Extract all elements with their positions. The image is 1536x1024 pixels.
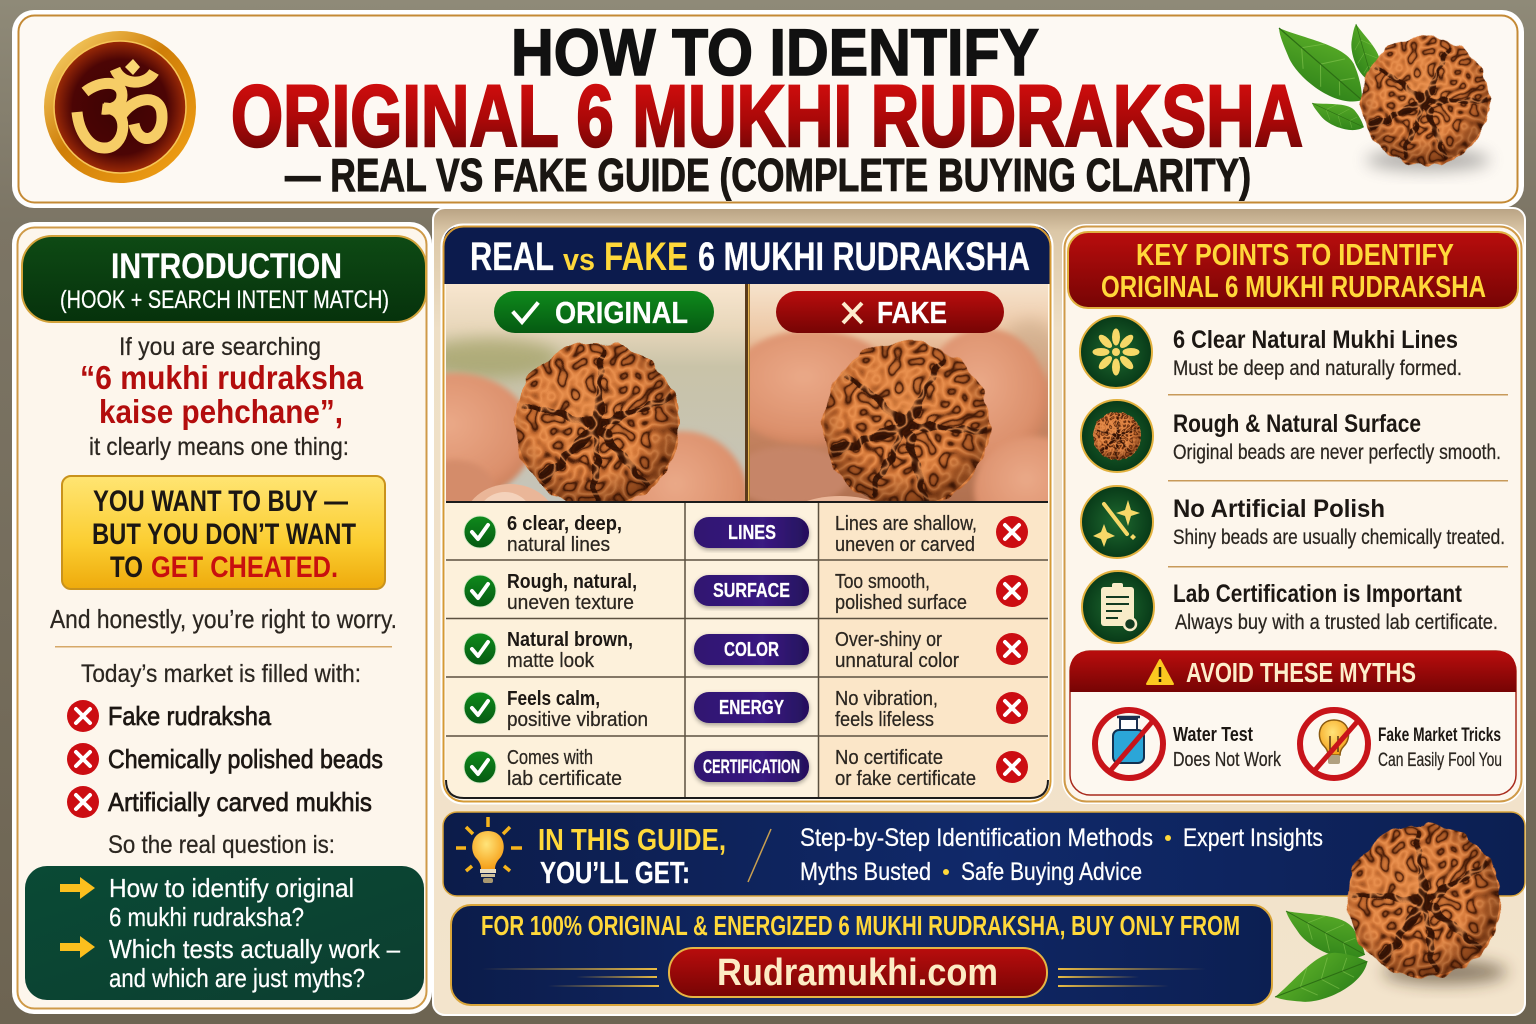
list: market problems	[67, 700, 383, 818]
callout: yellow box: GET CHEATED.	[151, 551, 338, 584]
row: surface: Too smooth,	[835, 571, 930, 593]
row: lines: LINES	[728, 522, 776, 544]
callout: yellow box	[62, 476, 385, 589]
row: energy: positive vibration	[507, 709, 648, 731]
myths header	[1070, 651, 1516, 692]
text: honestly: And honestly, you’re right to worry.	[50, 604, 397, 634]
guide heading: YOU’LL GET:	[540, 855, 690, 890]
row: lines: natural lines	[507, 534, 610, 556]
point: lab certification: Lab Certification is Important	[1173, 580, 1463, 608]
callout: questions	[25, 866, 424, 1000]
cream backdrop	[433, 208, 1525, 1015]
icon: bead	[1081, 400, 1153, 472]
row: lines: uneven or carved	[835, 534, 975, 556]
icon: sparkles	[1081, 486, 1153, 558]
header panel	[12, 10, 1524, 208]
row: lines: Lines are shallow,	[835, 513, 977, 535]
myths header: AVOID THESE MYTHS	[1186, 657, 1416, 688]
icon: rudraksha and leaves bottom right	[1267, 812, 1513, 1015]
icon: no water test	[1095, 710, 1163, 778]
introduction header: (HOOK + SEARCH INTENT MATCH)	[60, 286, 389, 314]
callout: questions: 6 mukhi rudraksha?	[109, 902, 304, 932]
row: lines: 6 clear, deep,	[507, 513, 622, 535]
callout: yellow box: YOU WANT TO BUY —	[93, 485, 348, 518]
list: market problems: Fake rudraksha	[108, 701, 271, 731]
key points header: KEY POINTS TO IDENTIFY	[1136, 237, 1454, 272]
point: mukhi lines: 6 Clear Natural Mukhi Lines	[1173, 326, 1458, 354]
title line 3: — REAL VS FAKE GUIDE (COMPLETE BUYING CLARITY)	[285, 149, 1251, 201]
introduction header: INTRODUCTION	[111, 247, 342, 286]
guide heading: IN THIS GUIDE,	[538, 822, 726, 857]
guide heading	[538, 822, 726, 890]
row: certification: CERTIFICATION	[703, 757, 800, 778]
callout: yellow box: BUT YOU DON’T WANT	[92, 518, 356, 551]
myth: water test	[1095, 710, 1282, 778]
guide list: Step-by-Step Identification Methods	[800, 824, 1153, 852]
badge: fake	[776, 291, 1004, 333]
key points header	[1068, 232, 1518, 308]
icon: om emblem	[44, 31, 196, 183]
introduction header	[22, 236, 426, 322]
text: market: Today’s market is filled with:	[81, 660, 361, 688]
banner: in this guide	[443, 812, 1525, 896]
list: market problems: Artificially carved mukhis	[108, 787, 372, 817]
point: mukhi lines: Must be deep and naturally formed.	[1173, 357, 1462, 380]
text: real question: So the real question is:	[108, 831, 335, 859]
point: mukhi lines	[1080, 316, 1462, 388]
row: energy: feels lifeless	[835, 709, 934, 731]
row: color: Natural brown,	[507, 629, 633, 651]
intro text: kaise pehchane”,	[99, 393, 343, 430]
row: certification: Comes with	[507, 747, 593, 769]
row: lines	[464, 513, 1028, 556]
title line 1: HOW TO IDENTIFY	[511, 15, 1039, 89]
callout: questions: and which are just myths?	[109, 963, 365, 993]
row: surface: SURFACE	[713, 580, 790, 602]
intro text: “6 mukhi rudraksha	[80, 359, 364, 396]
row: energy: No vibration,	[835, 688, 938, 710]
comparison header: vs	[563, 242, 595, 277]
badge: fake: FAKE	[877, 295, 947, 330]
panel: introduction	[12, 222, 432, 1014]
comparison header: FAKE	[604, 235, 688, 279]
call to action: FOR 100% ORIGINAL & ENERGIZED 6 MUKHI RUDRAKSHA, BUY ONLY FROM	[481, 910, 1240, 941]
callout: questions: How to identify original	[109, 873, 354, 903]
point: rough surface	[1081, 400, 1501, 472]
list: market problems: Chemically polished beads	[108, 744, 383, 774]
callout: questions: Which tests actually work –	[109, 934, 400, 964]
comparison table	[446, 502, 1048, 798]
row: surface	[464, 571, 1028, 614]
icon: light bulb	[456, 817, 522, 883]
row: color	[464, 629, 1028, 672]
panel: avoid these myths	[1070, 651, 1516, 795]
website button: Rudramukhi.com	[717, 952, 998, 994]
row: certification: No certificate	[835, 747, 943, 769]
photo: original bead	[446, 284, 745, 501]
guide list: Safe Buying Advice	[961, 858, 1142, 886]
row: certification	[464, 747, 1028, 790]
row: energy: Feels calm,	[507, 688, 600, 710]
myth: market tricks	[1300, 710, 1502, 778]
guide list: Expert Insights	[1183, 824, 1323, 852]
badge: original: ORIGINAL	[555, 295, 688, 330]
panel: key points	[1062, 224, 1524, 804]
myth: water test: Does Not Work	[1173, 749, 1282, 771]
row: color: Over-shiny or	[835, 629, 942, 651]
comparison header: REAL	[470, 235, 554, 279]
icon: no fake bulb	[1300, 710, 1368, 778]
icon: certificate	[1082, 571, 1154, 643]
point: no polish: No Artificial Polish	[1173, 495, 1385, 523]
row: energy	[464, 688, 1028, 731]
icon: rudraksha with leaves	[1265, 10, 1507, 183]
callout: yellow box: TO	[110, 551, 143, 584]
row: certification: lab certificate	[507, 768, 622, 790]
point: no polish	[1081, 486, 1505, 558]
point: rough surface: Rough & Natural Surface	[1173, 410, 1421, 438]
badge: original	[494, 291, 714, 333]
row: color: COLOR	[724, 639, 779, 661]
myth: water test: Water Test	[1173, 724, 1253, 746]
icon: flower	[1080, 316, 1152, 388]
row: color: matte look	[507, 650, 595, 672]
row: certification: or fake certificate	[835, 768, 976, 790]
intro text: If you are searching	[119, 333, 321, 361]
comparison header	[443, 226, 1051, 284]
row: surface: Rough, natural,	[507, 571, 637, 593]
intro text	[80, 333, 364, 461]
panel: real vs fake	[440, 224, 1054, 804]
guide list: Myths Busted	[800, 858, 931, 886]
row: color: unnatural color	[835, 650, 959, 672]
photo: fake bead	[750, 284, 1048, 501]
row: surface: uneven texture	[507, 592, 634, 614]
row: surface: polished surface	[835, 592, 967, 614]
comparison header: 6 MUKHI RUDRAKSHA	[698, 235, 1030, 279]
point: lab certification	[1082, 571, 1498, 643]
call to action	[451, 905, 1272, 1005]
guide list	[800, 824, 1323, 886]
row: energy: ENERGY	[719, 697, 785, 719]
intro text: it clearly means one thing:	[89, 433, 349, 461]
